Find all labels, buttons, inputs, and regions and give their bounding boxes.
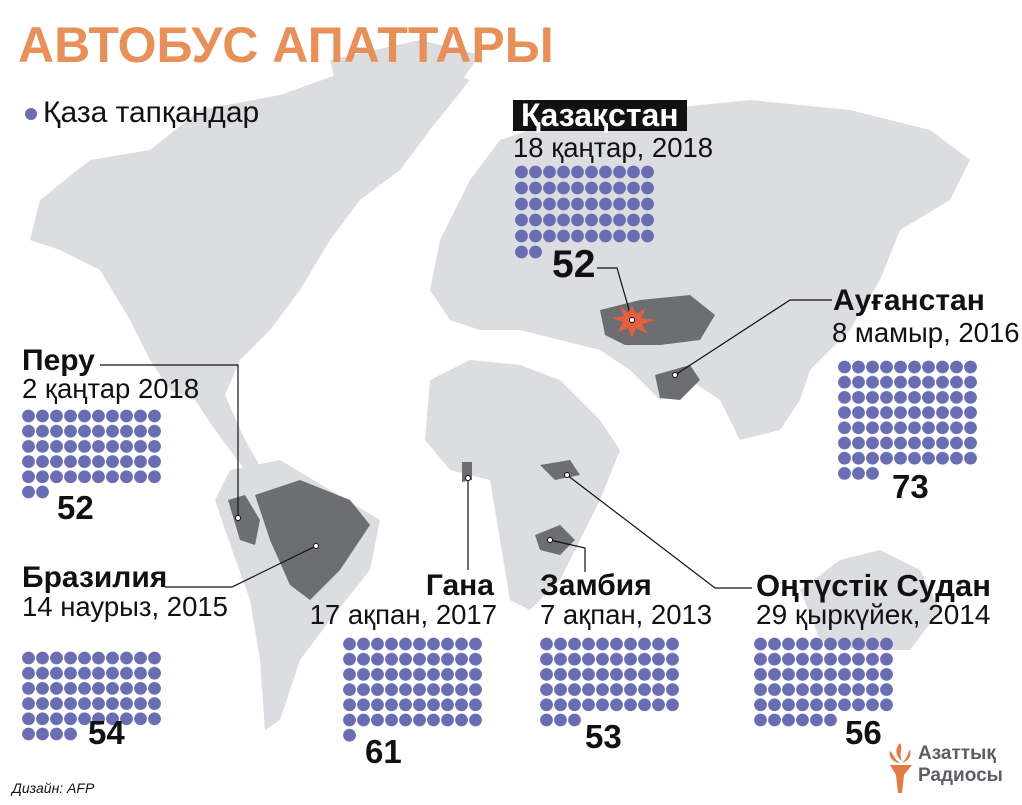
dots peru	[22, 409, 162, 500]
panel: brazil: Бразилия	[22, 561, 167, 594]
panel: ghana: 17 ақпан, 2017	[310, 599, 497, 630]
dots zambia	[540, 637, 680, 728]
panel: zambia	[540, 569, 712, 630]
dots ghana	[343, 637, 483, 743]
panel: zambia: 7 ақпан, 2013	[540, 599, 712, 630]
panel: ghana	[310, 569, 497, 630]
panel: south sudan: 29 қыркүйек, 2014	[756, 599, 990, 630]
credit: Дизайн: AFP	[12, 780, 94, 796]
text: 52	[57, 489, 94, 526]
dots brazil	[22, 651, 162, 742]
panel: kazakhstan: Қазақстан	[521, 97, 679, 133]
text: 53	[585, 718, 622, 755]
panel: peru: Перу	[22, 344, 95, 377]
logo	[890, 743, 1003, 793]
panel: south sudan: Оңтүстік Судан	[756, 568, 991, 603]
panel: kazakhstan: 18 қаңтар, 2018	[513, 132, 713, 163]
dots south sudan	[754, 637, 894, 728]
logo: Радиосы	[918, 765, 1003, 786]
legend: Қаза тапқандар	[43, 96, 259, 129]
panel: kazakhstan	[513, 97, 713, 163]
text: 56	[845, 714, 882, 751]
panel: brazil: 14 наурыз, 2015	[22, 591, 228, 622]
text: 52	[552, 243, 595, 286]
panel: south sudan	[756, 568, 991, 630]
title: АВТОБУС АПАТТАРЫ	[18, 17, 554, 73]
text: 61	[365, 733, 402, 770]
logo: Азаттық	[918, 743, 996, 764]
panel: zambia: Замбия	[540, 569, 652, 602]
text: 8 мамыр, 2016	[832, 317, 1020, 348]
panel: ghana: Гана	[426, 569, 494, 602]
panel: peru: 2 қаңтар 2018	[22, 373, 199, 404]
panel: brazil	[22, 561, 228, 622]
text: 54	[88, 714, 125, 751]
panel: peru	[22, 344, 199, 404]
dots afghanistan	[838, 360, 978, 482]
text: 73	[892, 468, 929, 505]
dots kazakhstan	[515, 165, 655, 261]
panel: afghanistan: Ауғанстан	[833, 284, 985, 317]
